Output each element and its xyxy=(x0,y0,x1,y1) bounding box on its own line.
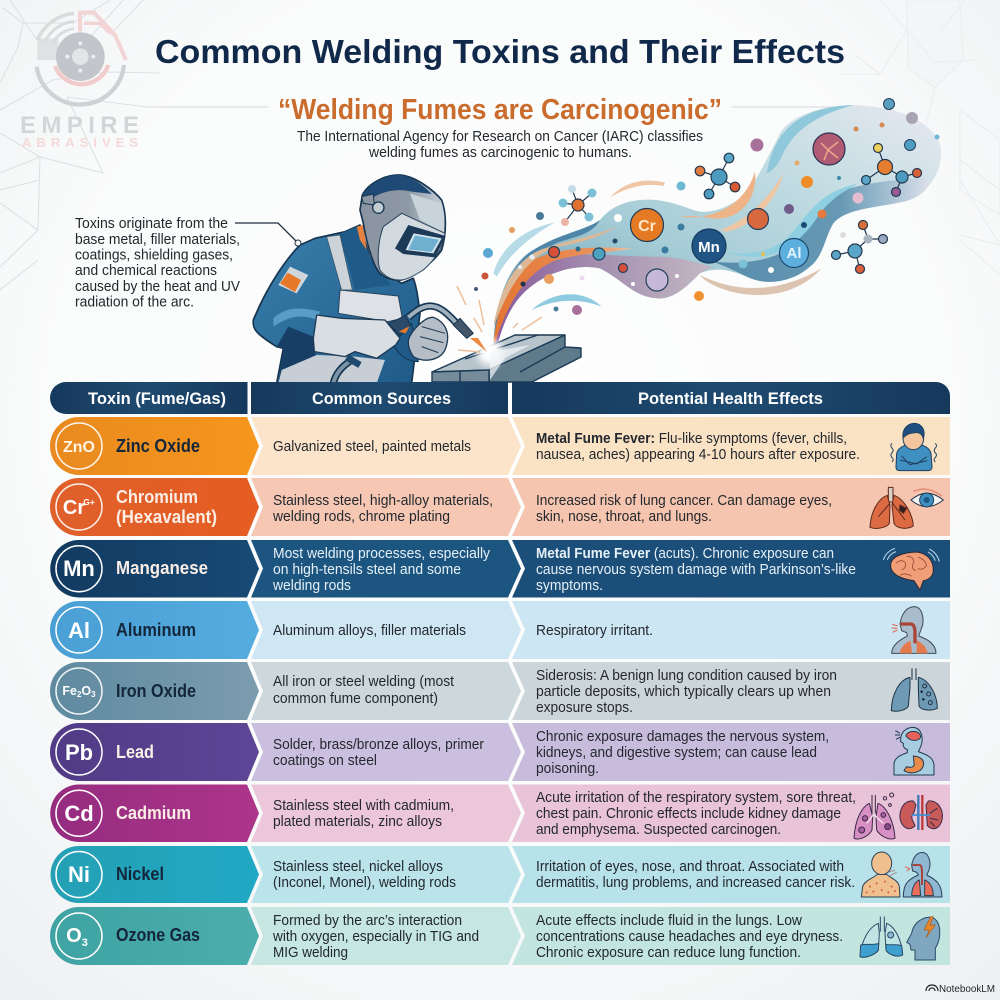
header: toxin xyxy=(50,382,248,414)
header: effects xyxy=(512,382,950,414)
sources text: coatings on steel xyxy=(273,752,377,769)
badge: NotebookLM: NotebookLM xyxy=(939,983,995,995)
divider strokes beside quote xyxy=(147,106,860,108)
sources text: Galvanized steel, painted metals xyxy=(273,438,471,455)
effects text: symptoms. xyxy=(536,577,603,594)
dark blue band, upper left xyxy=(495,220,600,330)
background line pattern, top right xyxy=(840,0,1000,275)
toxin cell: G+ xyxy=(83,497,95,507)
fume cloud xyxy=(493,105,941,347)
sphere: Mn xyxy=(692,229,726,263)
dark blue band, right xyxy=(707,178,928,282)
effects text: Metal Fume Fever (acuts). Chronic exposure can xyxy=(536,545,834,562)
row: ozone gas xyxy=(50,907,950,965)
side note: origin of toxins: Toxins originate from the xyxy=(75,215,228,232)
effects text: dermatitis, lung problems, and increased cancer risk. xyxy=(536,874,855,891)
logo word ABRASIVES: ABRASIVES xyxy=(22,135,138,150)
effects text: Acute effects include fluid in the lungs. Low xyxy=(536,912,802,929)
toxin cell: Cadmium xyxy=(116,803,191,823)
effects text: and emphysema. Suspected carcinogen. xyxy=(536,821,781,838)
title: Common Welding Toxins and Their Effects xyxy=(155,33,845,70)
small spheres xyxy=(544,208,768,291)
toxin cell: Fe xyxy=(62,684,77,698)
sources text: welding rods, chrome plating xyxy=(272,508,450,525)
sources text xyxy=(272,912,479,961)
side note: origin of toxins: radiation of the arc. xyxy=(75,294,194,310)
row: zinc oxide xyxy=(50,417,950,475)
effects text xyxy=(536,858,855,891)
sources text: All iron or steel welding (most xyxy=(273,673,455,690)
icon: skin rash and airway xyxy=(861,852,942,897)
background line pattern, top left xyxy=(0,0,267,290)
toxin cell xyxy=(50,662,259,720)
helmet strap xyxy=(362,194,374,205)
table xyxy=(50,382,950,965)
wisp near molecule xyxy=(720,173,783,232)
header: toxin: Toxin (Fume/Gas) xyxy=(88,389,226,408)
toxin cell: Pb xyxy=(65,740,93,765)
toxin cell: Ozone Gas xyxy=(116,925,200,945)
subheading quote: “Welding Fumes are Carcinogenic” xyxy=(278,94,722,126)
work piece xyxy=(432,335,581,382)
sources text: MIG welding xyxy=(273,944,348,961)
sources text xyxy=(272,545,490,594)
light blue left wisp xyxy=(493,222,555,277)
shoulder strap xyxy=(327,235,352,290)
helmet highlight xyxy=(410,193,444,232)
icon: respiratory tract xyxy=(892,607,936,653)
effects text xyxy=(536,430,860,463)
fume stream illustration xyxy=(474,98,941,347)
toxin cell: Cd xyxy=(64,801,94,826)
row: cadmium xyxy=(50,784,950,842)
table header xyxy=(50,382,950,414)
toxin cell: Manganese xyxy=(116,558,208,578)
toxin cell xyxy=(50,540,259,598)
effects text xyxy=(536,789,856,838)
effects text: Chronic exposure can reduce lung function. xyxy=(536,944,801,961)
sources text: Formed by the arc’s interaction xyxy=(273,912,462,929)
effects text: concentrations cause headaches and eye dryness. xyxy=(536,928,843,945)
intro text: The International Agency for Research on Cancer (IARC) classifies xyxy=(297,128,703,145)
effects text: Respiratory irritant. xyxy=(536,622,653,639)
effects text: chest pain. Chronic effects include kidney damage xyxy=(536,805,841,822)
sources text xyxy=(273,797,454,830)
effects text: Irritation of eyes, nose, and throat. Associated with xyxy=(536,858,844,875)
logo word EMPIRE: EMPIRE xyxy=(20,112,139,139)
helmet pivot xyxy=(373,202,384,213)
toxin cell xyxy=(50,907,259,965)
sphere: Mn: Mn xyxy=(698,239,720,256)
sources text xyxy=(273,858,456,891)
leader line from note to welder xyxy=(235,223,301,246)
row: chromium xyxy=(50,478,950,536)
jacket torso xyxy=(253,225,420,383)
logo disc xyxy=(37,13,126,104)
effects text xyxy=(536,912,843,961)
light ribbon in band xyxy=(727,183,858,257)
helmet shell xyxy=(360,175,445,280)
effects text: cause nervous system damage with Parkinson’s-like xyxy=(536,561,856,578)
right sleeve xyxy=(392,323,418,362)
sources text: Stainless steel, high-alloy materials, xyxy=(273,492,493,509)
sources text xyxy=(273,673,455,707)
row: aluminum xyxy=(50,601,950,659)
apron xyxy=(338,290,402,322)
toxin cell: 3 xyxy=(91,690,96,699)
sources text: Most welding processes, especially xyxy=(273,545,490,562)
icon: lungs with deposits xyxy=(891,668,937,711)
molecule 2 xyxy=(695,153,740,199)
sources text xyxy=(272,492,493,525)
sources text: with oxygen, especially in TIG and xyxy=(272,928,479,945)
badge mark xyxy=(926,985,938,991)
toxin cell: Aluminum xyxy=(116,620,196,640)
toxin cell: O xyxy=(66,925,82,947)
toxin cell: Nickel xyxy=(116,864,164,884)
left glove xyxy=(313,315,400,358)
icon: shivering person xyxy=(891,423,936,471)
helmet visor plate xyxy=(378,213,445,280)
upper orange wisp xyxy=(680,172,755,219)
row: manganese xyxy=(50,540,950,598)
purple band xyxy=(495,254,713,347)
torch xyxy=(388,306,473,338)
toxin cell: 2 xyxy=(77,690,82,699)
welding hose xyxy=(333,357,360,383)
icon: body with brain and stomach xyxy=(894,727,934,775)
toxin cell: 3 xyxy=(82,937,88,949)
weld sparks xyxy=(457,286,542,380)
intro text: welding fumes as carcinogenic to humans. xyxy=(368,144,632,161)
icon: fluid lungs and headache xyxy=(860,917,940,960)
tan lower ribbon xyxy=(700,268,822,295)
header: sources xyxy=(251,382,508,414)
toxin cell: Cr xyxy=(63,497,85,519)
icon: lungs and kidneys xyxy=(854,793,942,839)
toxin cell: O xyxy=(81,684,91,698)
right glove xyxy=(408,317,448,360)
effects text: kidneys, and digestive system; can cause lead xyxy=(536,744,817,761)
sources text: (Inconel, Monel), welding rods xyxy=(273,874,456,891)
sources text: plated materials, zinc alloys xyxy=(273,813,442,830)
effects text xyxy=(536,492,832,525)
row: lead xyxy=(50,723,950,781)
row: iron oxide xyxy=(50,662,950,720)
sphere: Al: Al xyxy=(786,245,802,262)
light blue top ribbon xyxy=(767,105,853,173)
icon: brain xyxy=(883,548,939,590)
effects text: exposure stops. xyxy=(536,699,633,716)
effects text: Acute irritation of the respiratory system, sore threat, xyxy=(536,789,856,806)
toxin cell xyxy=(50,601,259,659)
toxin cell xyxy=(50,846,259,903)
lower apron xyxy=(278,355,385,383)
sources text: Aluminum alloys, filler materials xyxy=(273,622,466,639)
toxin cell xyxy=(50,417,259,475)
side note: origin of toxins xyxy=(75,215,240,310)
molecule 4 xyxy=(832,220,888,274)
logo watermark: Empire Abrasives xyxy=(20,13,139,150)
effects text: Chronic exposure damages the nervous system, xyxy=(536,728,829,745)
toxin cell xyxy=(50,478,259,536)
sources text: common fume component) xyxy=(273,690,438,707)
toxin cell: Zinc Oxide xyxy=(116,436,200,456)
orange band xyxy=(493,248,633,343)
sphere: Al xyxy=(780,238,808,268)
effects text: Siderosis: A benign lung condition caused by iron xyxy=(536,667,837,684)
toxin cell xyxy=(50,784,259,842)
small orange wisp xyxy=(610,181,665,197)
molecule 1 xyxy=(558,185,596,226)
effects text xyxy=(536,728,829,777)
sleeve shading xyxy=(277,327,317,383)
sources text: welding rods xyxy=(272,577,351,594)
glove finger lines xyxy=(420,327,445,353)
lower left wisp xyxy=(532,294,602,310)
sleeve highlight xyxy=(273,308,320,327)
helmet window xyxy=(395,225,446,257)
effects text: particle deposits, which typically clears up when xyxy=(536,683,831,700)
side note: origin of toxins: base metal, filler materials, xyxy=(75,231,240,248)
sources text: Stainless steel, nickel alloys xyxy=(273,858,443,875)
side note: origin of toxins: and chemical reactions xyxy=(75,262,217,279)
sources text: on high-tensils steel and some xyxy=(273,561,461,578)
collar xyxy=(357,225,367,250)
side note: origin of toxins: coatings, shielding gases, xyxy=(75,246,233,264)
intro text xyxy=(297,128,703,161)
effects text xyxy=(536,545,856,594)
toxin cell: (Hexavalent) xyxy=(116,507,217,527)
dark inner jacket xyxy=(328,227,392,290)
shoulder patch xyxy=(278,267,308,293)
effects text: Increased risk of lung cancer. Can damage eyes, xyxy=(536,492,832,509)
toxin cell: ZnO xyxy=(63,439,95,456)
toxin cell: Ni xyxy=(68,862,90,887)
effects text: Metal Fume Fever: Flu-like symptoms (fever, chills, xyxy=(536,430,847,447)
sources text xyxy=(273,736,484,769)
helmet cap band xyxy=(362,175,432,204)
icon: lungs and eye xyxy=(870,487,943,528)
sphere: Cr: Cr xyxy=(638,218,656,235)
effects text: nausea, aches) appearing 4-10 hours after exposure. xyxy=(536,446,860,463)
effects text xyxy=(536,667,837,716)
sphere: red particle xyxy=(813,133,845,165)
molecule 3 xyxy=(862,144,922,196)
toxin cell: Iron Oxide xyxy=(116,681,196,701)
sources text: Stainless steel with cadmium, xyxy=(273,797,454,814)
toxin cell xyxy=(50,723,259,781)
row: nickel xyxy=(50,846,950,903)
toxin cell: Lead xyxy=(116,742,154,762)
sources text: Solder, brass/bronze alloys, primer xyxy=(273,736,484,753)
toxin cell: Al xyxy=(68,618,90,643)
tan band xyxy=(493,227,617,327)
effects text: poisoning. xyxy=(536,760,599,777)
header: effects: Potential Health Effects xyxy=(638,389,823,408)
welder illustration xyxy=(253,175,473,383)
effects text: skin, nose, throat, and lungs. xyxy=(536,508,712,525)
side note: origin of toxins: caused by the heat and UV xyxy=(75,278,240,295)
toxin cell: Chromium xyxy=(116,487,198,507)
sphere: Cr xyxy=(630,208,664,242)
toxin cell: Mn xyxy=(63,556,95,581)
floating dots xyxy=(474,98,940,315)
header: sources: Common Sources xyxy=(312,389,451,408)
